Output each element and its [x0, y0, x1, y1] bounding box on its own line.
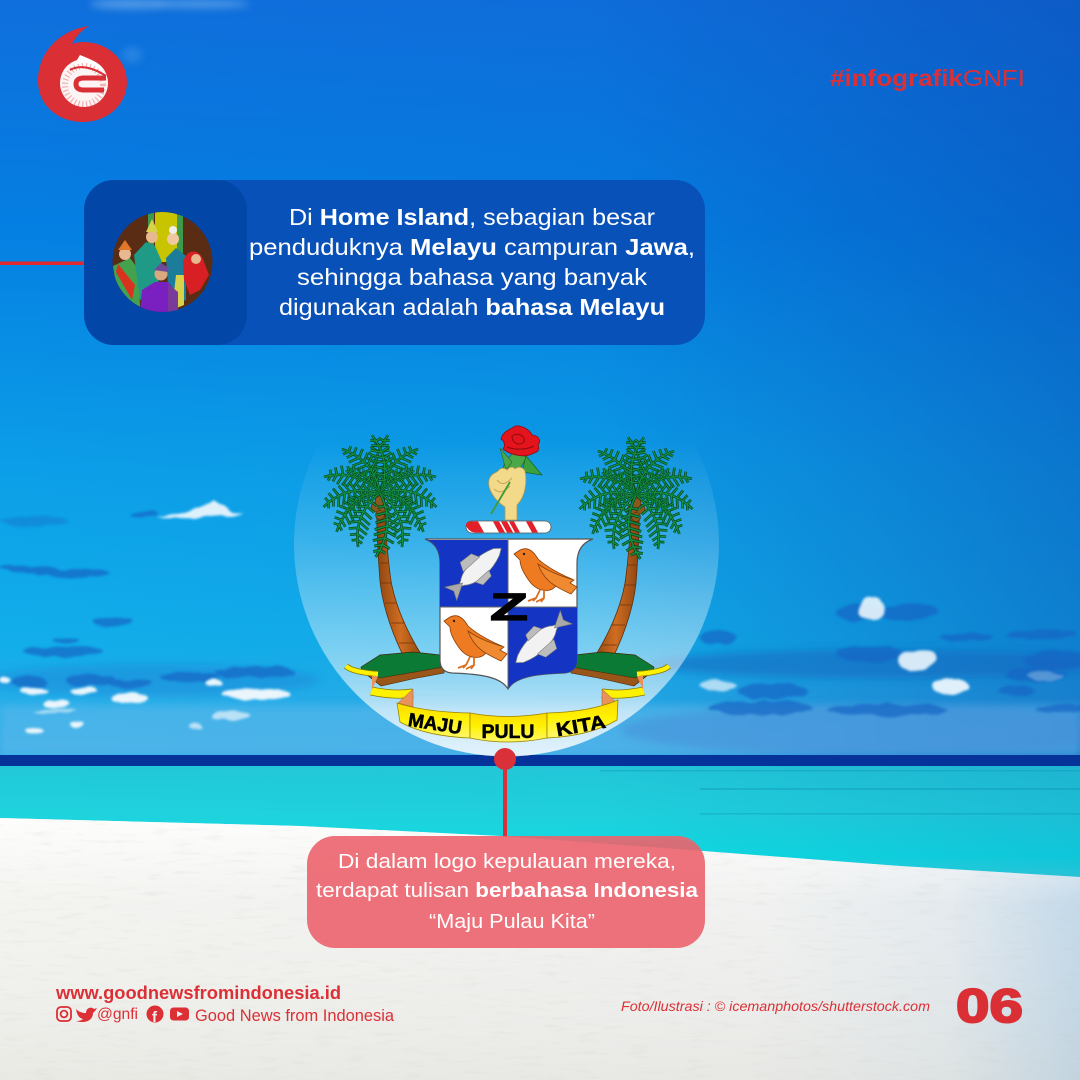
bottom callout: “Maju Pulau Kita” — [429, 911, 595, 933]
motto ribbon — [346, 666, 669, 743]
connector line to top panel — [0, 262, 84, 265]
panel text: digunakan adalah bahasa Melayu — [279, 294, 665, 320]
connector with dot — [494, 748, 516, 837]
icon: instagram — [57, 1007, 71, 1021]
island right — [571, 652, 654, 686]
icon: facebook: f — [152, 1009, 158, 1026]
footer website and social: @gnfi — [97, 1006, 138, 1023]
coat of arms disc — [294, 332, 719, 756]
motto ribbon: KITA — [555, 712, 608, 741]
bottom callout: terdapat tulisan berbahasa Indonesia — [316, 880, 699, 902]
palm tree right — [576, 437, 696, 670]
motto ribbon: PULU — [482, 722, 534, 743]
clouds in the sky — [0, 0, 1080, 755]
bottom callout — [307, 836, 705, 948]
wreath — [466, 521, 551, 533]
crest: hand holding rose — [489, 426, 542, 520]
photo tile — [84, 180, 247, 345]
panel text: Di Home Island , sebagian besar — [289, 204, 655, 230]
icon: facebook — [146, 1006, 164, 1026]
hashtag: #infografik GNFI — [830, 65, 1025, 91]
coat of arms — [320, 426, 696, 743]
motto ribbon: MAJU — [407, 710, 463, 739]
photo credit: Foto/Ilustrasi : © icemanphotos/shutterstock.com — [621, 999, 930, 1014]
photo: people in traditional dress — [112, 212, 214, 314]
bottom callout: Di dalam logo kepulauan mereka, — [338, 851, 676, 873]
panel text: sehingga bahasa yang banyak — [297, 264, 647, 290]
white sand beach — [0, 810, 1080, 1080]
icon: twitter — [76, 1008, 97, 1022]
panel text — [249, 204, 695, 320]
shield — [425, 536, 593, 689]
page number: 06 — [956, 979, 1023, 1032]
palm tree left — [320, 435, 440, 668]
ocean — [0, 755, 1080, 886]
shield: Z — [490, 587, 528, 629]
top panel — [84, 180, 705, 345]
icon: youtube — [170, 1008, 189, 1020]
island left — [361, 652, 444, 686]
footer website and social — [55, 982, 395, 1026]
panel text: penduduknya Melayu campuran Jawa, — [249, 234, 695, 260]
footer website and social: Good News from Indonesia — [195, 1006, 395, 1025]
GNFI logo — [38, 26, 127, 122]
footer website and social: www.goodnewsfromindonesia.id — [55, 982, 341, 1003]
sky background — [0, 0, 1080, 760]
